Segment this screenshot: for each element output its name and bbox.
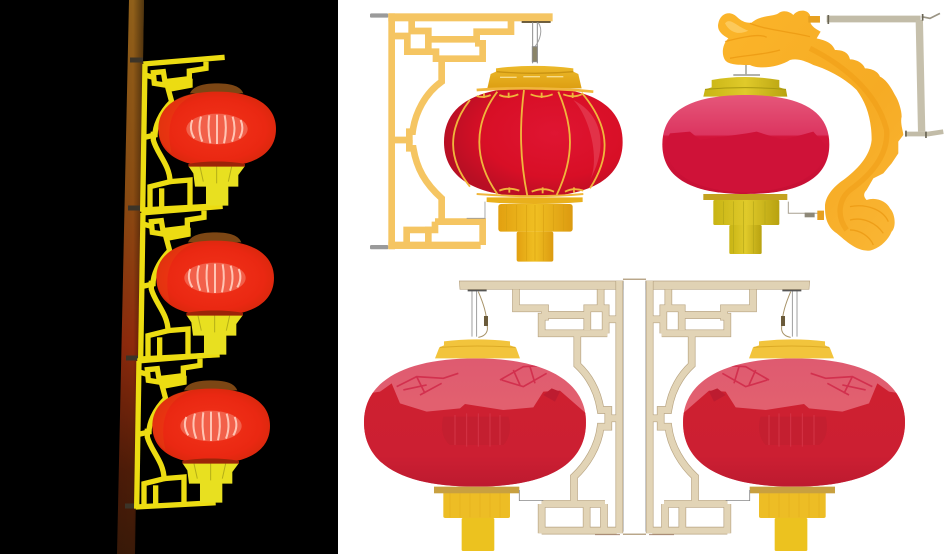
lantern with bracket: left	[360, 279, 646, 551]
lantern: pink-red with olive cap	[662, 77, 829, 254]
lamp pole	[117, 0, 144, 554]
hanger	[522, 22, 551, 63]
bracket: middle	[140, 206, 223, 361]
lantern: upper glowing	[158, 83, 276, 206]
lantern with bracket: right	[623, 279, 909, 551]
lantern: middle glowing	[156, 232, 274, 355]
dragon	[718, 11, 903, 251]
bracket: upper	[142, 57, 225, 212]
panel: lantern with gold lattice bracket	[370, 13, 623, 262]
lantern: lower glowing	[152, 380, 270, 503]
hanger	[733, 65, 760, 75]
lantern: red with gold ribs	[444, 66, 623, 262]
panel: night street lanterns	[0, 0, 338, 554]
panel: lantern with dragon bracket	[662, 11, 943, 254]
background: black night sky	[0, 0, 338, 554]
bracket: lower	[136, 354, 219, 509]
pole clamps	[125, 60, 143, 506]
lattice bracket	[370, 13, 553, 249]
panel: twin lanterns with beige lattice brackets	[360, 279, 909, 551]
metal frame	[788, 13, 943, 217]
